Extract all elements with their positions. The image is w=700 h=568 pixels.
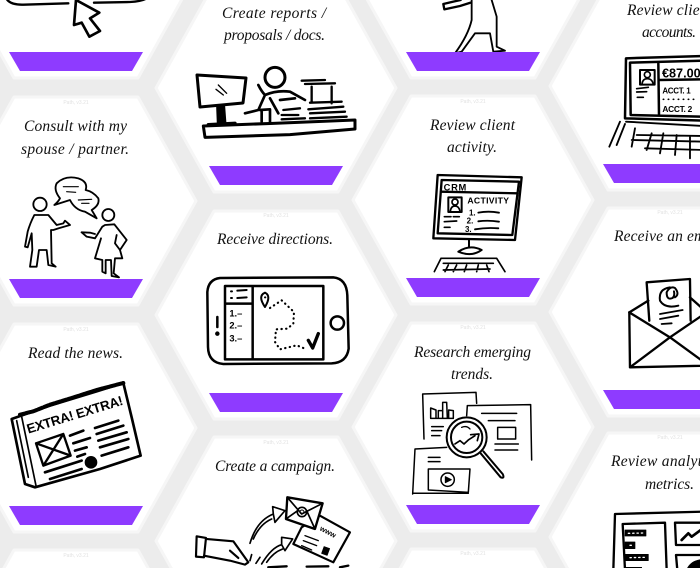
heading: spouse / partner. xyxy=(21,141,129,158)
hexagon xyxy=(353,323,593,531)
icon: phone with map: 3.– xyxy=(229,333,242,343)
purple bar xyxy=(406,505,540,524)
panel: research emerging trends xyxy=(353,323,593,531)
purple bar xyxy=(9,279,143,298)
version tag: Path, v3.21 xyxy=(460,551,486,557)
icon: CRM computer: 2. xyxy=(467,217,473,226)
purple bar xyxy=(603,390,700,409)
version tag: Path, v3.21 xyxy=(460,325,486,331)
panel: review analytics xyxy=(550,433,700,568)
panel: review client activity xyxy=(353,96,593,304)
purple bar xyxy=(209,166,343,185)
purple bar xyxy=(209,393,343,412)
heading: Create reports / xyxy=(222,5,328,22)
icon: laptop with accounts: ACCT. 1 xyxy=(662,87,691,96)
purple bar xyxy=(9,506,143,525)
panel: figure walking (cropped) xyxy=(353,0,593,78)
hexagon xyxy=(353,549,593,568)
hexagon xyxy=(156,211,396,419)
hexagon xyxy=(0,97,196,305)
heading: Create a campaign. xyxy=(215,458,335,475)
icon: CRM computer: ACTIVITY xyxy=(467,196,509,206)
hexagon xyxy=(156,0,396,192)
version tag: Path, v3.21 xyxy=(460,99,486,105)
version tag: Path, v3.21 xyxy=(657,435,683,441)
hexagon xyxy=(550,433,700,568)
hexagon xyxy=(353,0,593,78)
icon: laptop with accounts: ACCT. 2 xyxy=(662,104,693,114)
icon: phone with map: 2.– xyxy=(229,321,242,331)
icon: person at desk xyxy=(197,67,355,137)
icon: laptop with accounts xyxy=(609,56,700,158)
heading: Consult with my xyxy=(24,118,127,135)
heading: trends. xyxy=(451,366,493,383)
heading: accounts. xyxy=(642,24,696,41)
hexagon xyxy=(550,0,700,190)
version tag: Path, v3.21 xyxy=(263,213,289,219)
purple bar xyxy=(406,278,540,297)
panel: bottom centre-right (cropped) xyxy=(353,549,593,568)
icon: phone with map: 1.– xyxy=(229,308,242,318)
hexagon xyxy=(0,0,196,78)
version tag: Path, v3.21 xyxy=(63,553,89,559)
icon: CRM computer: 3. xyxy=(465,225,472,234)
icon: CRM computer: 1. xyxy=(469,208,476,217)
heading: Receive directions. xyxy=(216,231,333,248)
version tag: Path, v3.21 xyxy=(263,440,289,446)
icon: CRM computer xyxy=(433,175,522,272)
panel: create a campaign xyxy=(156,437,396,568)
heading: Research emerging xyxy=(413,344,531,361)
heading: Read the news. xyxy=(27,345,123,362)
panel: click cursor (cropped) xyxy=(0,0,196,78)
icon: newspaper: EXTRA! EXTRA! xyxy=(25,393,125,437)
icon: cursor xyxy=(7,0,146,37)
panel: read the news xyxy=(0,324,196,532)
icon: walking figure xyxy=(443,0,505,53)
hexagon xyxy=(550,208,700,416)
hexagon xyxy=(156,437,396,568)
version tag: Path, v3.21 xyxy=(657,210,683,216)
purple bar xyxy=(406,52,540,71)
panel: consult with spouse xyxy=(0,97,196,305)
icon: two people talking xyxy=(25,177,127,277)
hexagon xyxy=(0,550,196,568)
version tag: Path, v3.21 xyxy=(63,327,89,333)
icon: analytics dashboard xyxy=(613,512,700,568)
heading: proposals / docs. xyxy=(223,27,325,44)
panel: receive an email xyxy=(550,208,700,416)
hexagon xyxy=(0,324,196,532)
heading: Review client xyxy=(429,117,516,134)
panel: review client accounts xyxy=(550,0,700,190)
panel: bottom left (cropped) xyxy=(0,550,196,568)
heading: metrics. xyxy=(645,476,694,493)
hexagon xyxy=(353,96,593,304)
icon: CRM computer: CRM xyxy=(444,182,467,192)
icon: documents and magnifier xyxy=(413,392,532,494)
icon: hand launching envelope and brochure: www xyxy=(317,523,338,540)
panel: receive directions xyxy=(156,211,396,419)
icon: hand launching envelope and brochure xyxy=(196,497,350,567)
icon: newspaper xyxy=(12,383,141,487)
purple bar xyxy=(603,164,700,183)
purple bar xyxy=(9,52,143,71)
icon: laptop with accounts: €87.00 xyxy=(662,67,700,81)
icon: open envelope with letter xyxy=(629,279,700,367)
icon: phone with map xyxy=(207,277,349,364)
version tag: Path, v3.21 xyxy=(63,100,89,106)
panel: create reports xyxy=(156,0,396,192)
heading: activity. xyxy=(447,139,497,156)
